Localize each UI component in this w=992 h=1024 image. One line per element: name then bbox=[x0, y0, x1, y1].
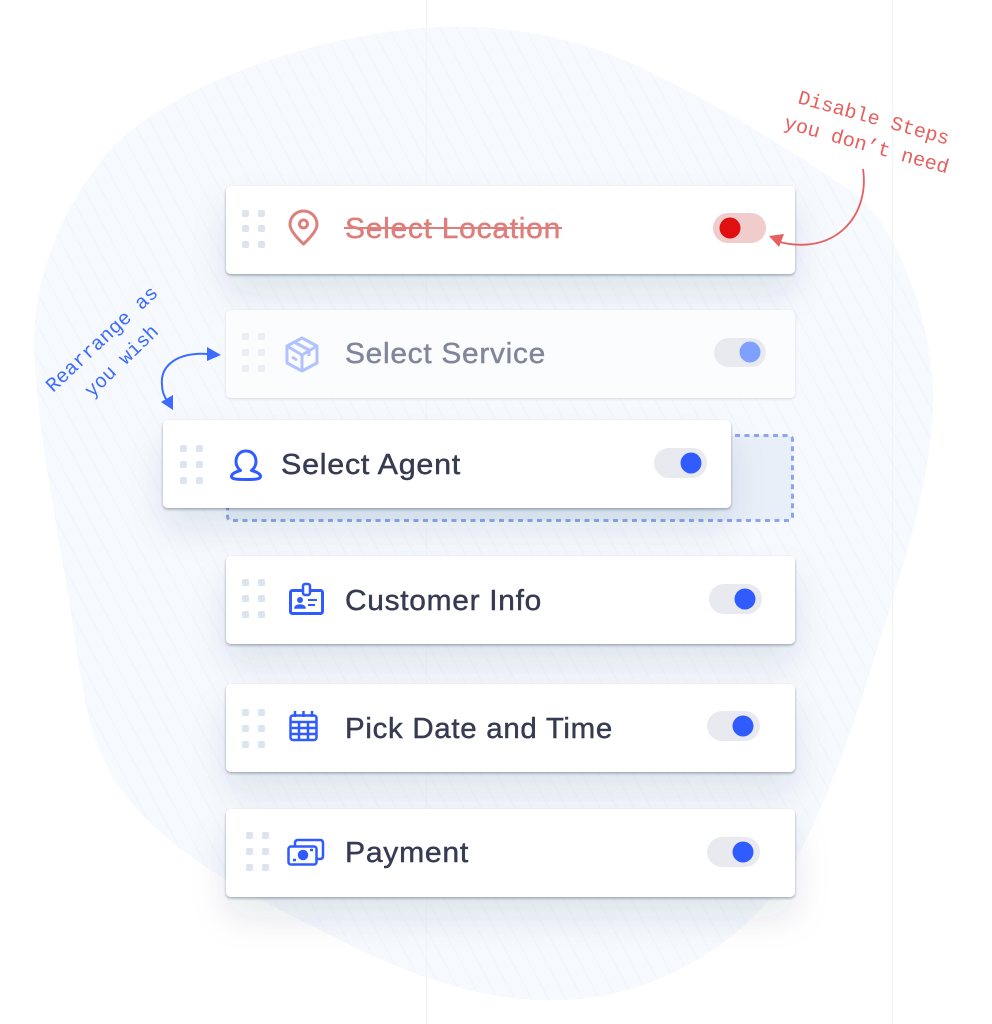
icon: calendar bbox=[290, 711, 317, 740]
annotation: rearrange: Rearrange as bbox=[42, 282, 164, 398]
toggle: on bbox=[707, 837, 760, 867]
toggle: on bbox=[707, 711, 760, 741]
toggle: off red bbox=[713, 213, 766, 243]
card: customer info bbox=[226, 556, 795, 644]
label: Select Service bbox=[345, 338, 546, 370]
icon: person bbox=[232, 451, 260, 480]
toggle: on faded bbox=[714, 338, 766, 367]
card: payment bbox=[226, 809, 795, 897]
drag handle bbox=[242, 210, 265, 248]
drag handle bbox=[242, 579, 265, 618]
label: Select Location bbox=[345, 213, 561, 245]
label: Customer Info bbox=[345, 585, 542, 617]
drag handle bbox=[242, 333, 265, 372]
annotation: rearrange: you wish bbox=[81, 321, 164, 403]
label: Payment bbox=[345, 837, 469, 869]
icon: box bbox=[287, 338, 317, 371]
drag handle bbox=[180, 445, 203, 484]
label: Select Agent bbox=[281, 449, 461, 481]
icon: location pin bbox=[290, 211, 317, 244]
drop placeholder bbox=[228, 436, 792, 520]
icon: banknotes bbox=[288, 840, 323, 864]
vertical guide lines bbox=[426, 0, 893, 1024]
card: select agent bbox=[163, 420, 731, 508]
strikethrough bbox=[344, 227, 562, 229]
annotation: disable steps: you don’t need bbox=[781, 113, 951, 180]
drag handle bbox=[246, 832, 269, 871]
icon: id card bbox=[290, 584, 322, 614]
card: select location bbox=[226, 186, 795, 274]
arrow: red to toggle bbox=[769, 169, 864, 247]
card: select service bbox=[226, 310, 795, 398]
toggle: on bbox=[654, 448, 707, 478]
drag handle bbox=[242, 709, 265, 748]
arrow: blue two-way bbox=[161, 347, 221, 410]
card: pick date and time bbox=[226, 684, 795, 772]
toggle: on bbox=[709, 584, 762, 614]
label: Pick Date and Time bbox=[345, 713, 613, 745]
annotation: disable steps: Disable Steps bbox=[795, 88, 952, 151]
